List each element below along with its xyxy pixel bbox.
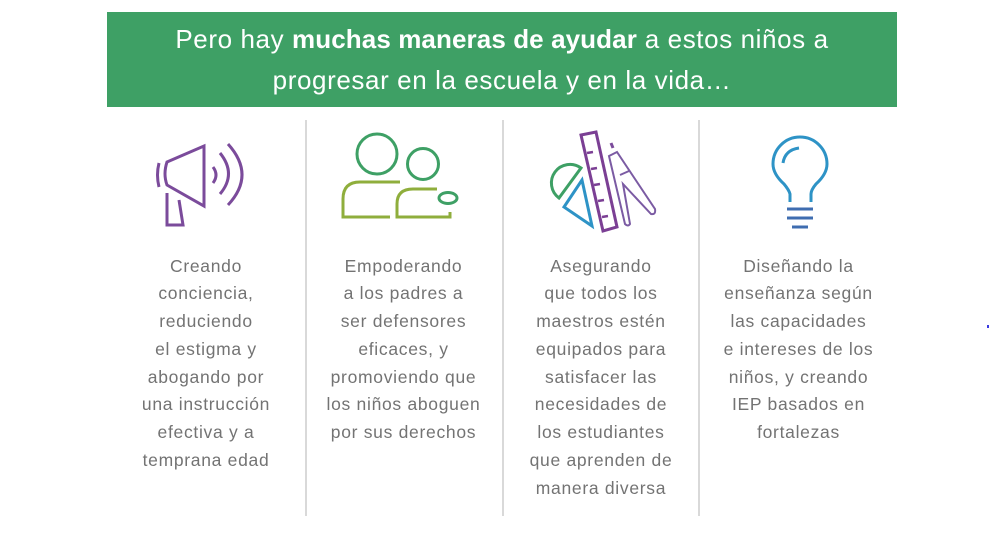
text: awareness [142, 256, 270, 470]
text: teachers: manera diversa [536, 478, 666, 498]
text: awareness: conciencia, [158, 283, 254, 303]
icon: light bulb [773, 137, 827, 227]
text: teachers: maestros estén [536, 311, 666, 331]
text: awareness: abogando por [148, 367, 264, 387]
text: teaching design [724, 256, 873, 442]
icon: parent and child [343, 134, 457, 217]
text: teaching design: IEP basados en [732, 394, 865, 414]
text: awareness: reduciendo [159, 311, 253, 331]
text: awareness: una instrucción [142, 394, 270, 414]
text: teachers: los estudiantes [537, 422, 665, 442]
text: teaching design: Diseñando la [743, 256, 854, 276]
text: teachers: equipados para [536, 339, 666, 359]
text: parents: Empoderando [345, 256, 462, 276]
text: awareness: temprana edad [143, 450, 269, 470]
banner heading: Pero hay muchas maneras de ayudar a estos niños a [175, 24, 829, 54]
icon: megaphone [158, 144, 242, 225]
text: teachers: Asegurando [550, 256, 652, 276]
text: teachers [530, 256, 672, 498]
icon: school tools [551, 132, 655, 231]
text: parents: eficaces, y [358, 339, 449, 359]
banner heading: progresar en la escuela y en la vida… [273, 65, 731, 95]
text: awareness: Creando [170, 256, 242, 276]
text: awareness: el estigma y [155, 339, 257, 359]
text: parents: promoviendo que [331, 367, 476, 387]
text: teachers: que aprenden de [530, 450, 672, 470]
text: parents [327, 256, 480, 442]
banner heading [107, 12, 897, 107]
text: parents: por sus derechos [331, 422, 476, 442]
text: teachers: que todos los [544, 283, 658, 303]
text: teachers: necesidades de [535, 394, 667, 414]
text: teaching design: e intereses de los [724, 339, 873, 359]
text: teaching design: enseñanza según [724, 283, 873, 303]
text: parents: a los padres a [344, 283, 463, 303]
text: teachers: satisfacer las [545, 367, 657, 387]
text: teaching design: las capacidades [730, 311, 866, 331]
text: parents: ser defensores [341, 311, 466, 331]
text: awareness: efectiva y a [158, 422, 254, 442]
text: teaching design: fortalezas [757, 422, 840, 442]
text: parents: los niños aboguen [327, 394, 480, 414]
text: teaching design: niños, y creando [729, 367, 868, 387]
